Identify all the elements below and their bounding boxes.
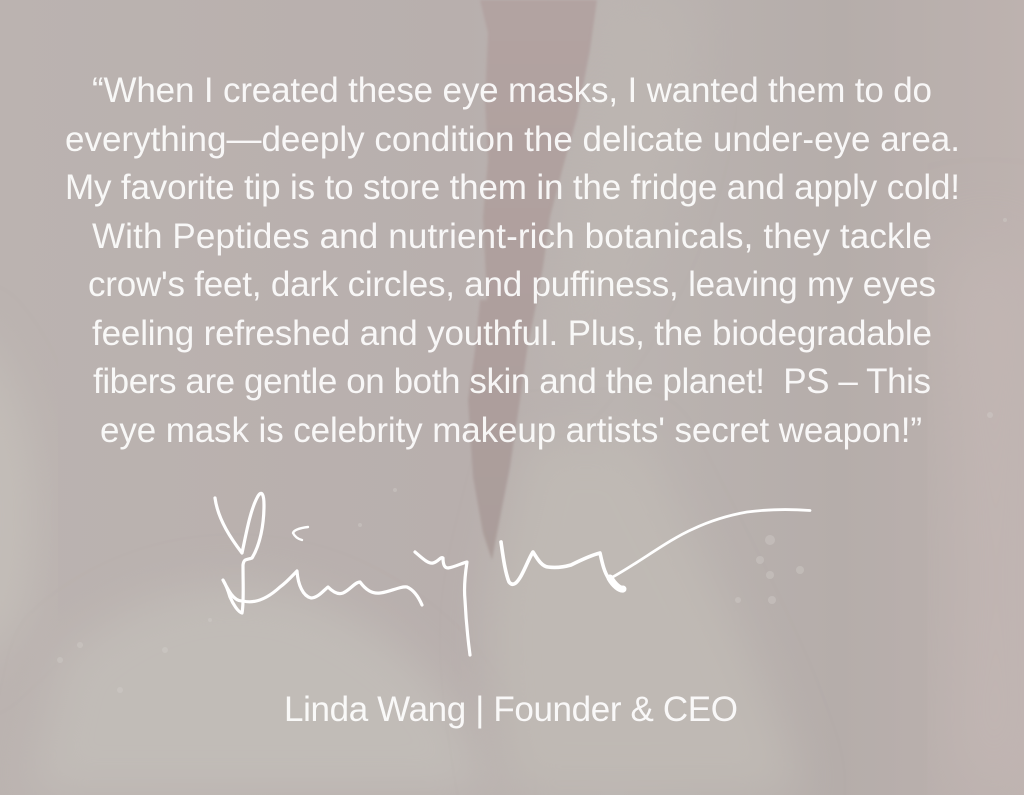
- quote text: everything—deeply condition the delicate under-eye area.: [65, 120, 960, 159]
- quote text: [65, 71, 960, 450]
- quote text: With Peptides and nutrient-rich botanicals, they tackle: [92, 217, 932, 256]
- attribution: Linda Wang | Founder & CEO: [284, 690, 738, 729]
- quote text: eye mask is celebrity makeup artists' secret weapon!”: [100, 411, 922, 450]
- quote text: crow's feet, dark circles, and puffiness, leaving my eyes: [88, 265, 936, 304]
- background: central streak: [468, 0, 597, 560]
- quote text: feeling refreshed and youthful. Plus, the biodegradable: [92, 314, 932, 353]
- signature: [215, 493, 810, 655]
- quote text: “When I created these eye masks, I wanted them to do: [92, 71, 932, 110]
- quote text: My favorite tip is to store them in the fridge and apply cold!: [65, 168, 960, 207]
- quote text: fibers are gentle on both skin and the planet! PS – This: [93, 362, 931, 401]
